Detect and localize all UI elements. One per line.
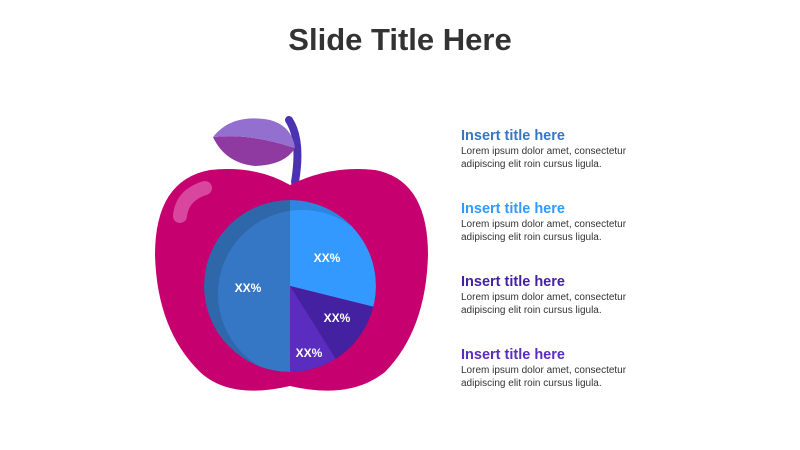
pie chart: XX% [324, 311, 351, 325]
item 3: Insert title here [461, 274, 565, 290]
pie chart: XX% [296, 346, 323, 360]
item 3: Lorem ipsum dolor amet, consectetur [461, 292, 626, 303]
item 4 [461, 347, 626, 389]
item 1: Insert title here [461, 128, 565, 144]
item 2 [461, 201, 626, 243]
apple body [155, 169, 428, 391]
item 3: adipiscing elit roin cursus ligula. [461, 305, 602, 316]
item 2: adipiscing elit roin cursus ligula. [461, 232, 602, 243]
item 4: Lorem ipsum dolor amet, consectetur [461, 365, 626, 376]
apple pie chart [155, 116, 428, 391]
item 1: adipiscing elit roin cursus ligula. [461, 159, 602, 170]
item 1: Lorem ipsum dolor amet, consectetur [461, 146, 626, 157]
title: Slide Title Here [288, 22, 512, 57]
item 2: Insert title here [461, 201, 565, 217]
item 2: Lorem ipsum dolor amet, consectetur [461, 219, 626, 230]
item 4: Insert title here [461, 347, 565, 363]
item 1 [461, 128, 626, 170]
item 3 [461, 274, 626, 316]
icon: stem [289, 120, 297, 182]
item 4: adipiscing elit roin cursus ligula. [461, 378, 602, 389]
pie chart [204, 200, 386, 378]
pie chart: XX% [314, 251, 341, 265]
icon: leaf [213, 118, 295, 166]
pie chart: XX% [235, 281, 262, 295]
